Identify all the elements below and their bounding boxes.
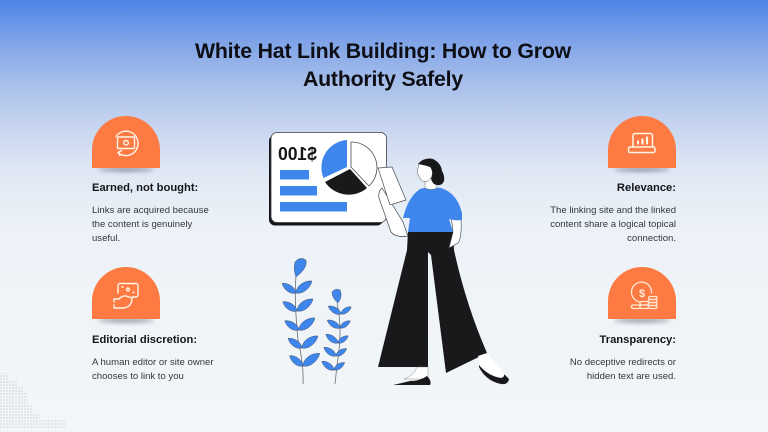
left foot: [404, 367, 428, 379]
presentation board chart: [269, 132, 386, 226]
text block: earned, not bought: the content is genuinely: [92, 219, 192, 230]
person presenting: [378, 159, 509, 385]
pie chart: [321, 140, 377, 195]
dotted corner texture: [0, 373, 65, 429]
text block: relevance: Relevance:: [617, 182, 676, 194]
icon badge: editorial discretion: [92, 267, 160, 323]
text block: earned, not bought: Links are acquired because: [92, 205, 209, 216]
icon badge: relevance: [608, 116, 676, 172]
text block: earned, not bought: [92, 182, 209, 244]
text block: transparency: Transparency:: [600, 334, 676, 346]
text block: editorial discretion: chooses to link to you: [92, 371, 184, 382]
mirrored $100 label: $100: [278, 144, 317, 164]
text block: transparency: hidden text are used.: [587, 371, 676, 382]
title: [195, 39, 572, 91]
text block: relevance: [550, 182, 676, 244]
text block: earned, not bought: useful.: [92, 233, 120, 244]
icon badge: transparency: [608, 267, 676, 323]
text block: earned, not bought: Earned, not bought:: [92, 182, 198, 194]
blue list bars: [280, 170, 347, 212]
paper: [378, 167, 406, 205]
arm: [379, 188, 408, 236]
shirt: [403, 187, 462, 232]
text block: relevance: The linking site and the linked: [550, 205, 676, 216]
icon badge: earned, not bought: [92, 116, 160, 172]
plant: short: [320, 289, 353, 384]
trousers: [378, 232, 487, 373]
text block: transparency: [570, 334, 676, 382]
neck: [425, 178, 437, 190]
text block: editorial discretion: A human editor or site owner: [92, 357, 214, 368]
icon badge: transparency: $: [639, 288, 645, 300]
text block: relevance: content share a logical topical: [550, 219, 676, 230]
back arm: [449, 215, 461, 248]
title: White Hat Link Building: How to Grow: [195, 39, 571, 63]
text block: transparency: No deceptive redirects or: [570, 357, 676, 368]
face: [417, 162, 433, 182]
right foot: [478, 353, 505, 378]
text block: editorial discretion: [92, 334, 214, 382]
left shoe: [393, 376, 431, 385]
text block: relevance: connection.: [627, 233, 676, 244]
text block: editorial discretion: Editorial discretion:: [92, 334, 197, 346]
right shoe: [479, 365, 509, 384]
plant: tall: [280, 258, 322, 384]
hair: [418, 159, 444, 185]
title: Authority Safely: [303, 67, 463, 91]
